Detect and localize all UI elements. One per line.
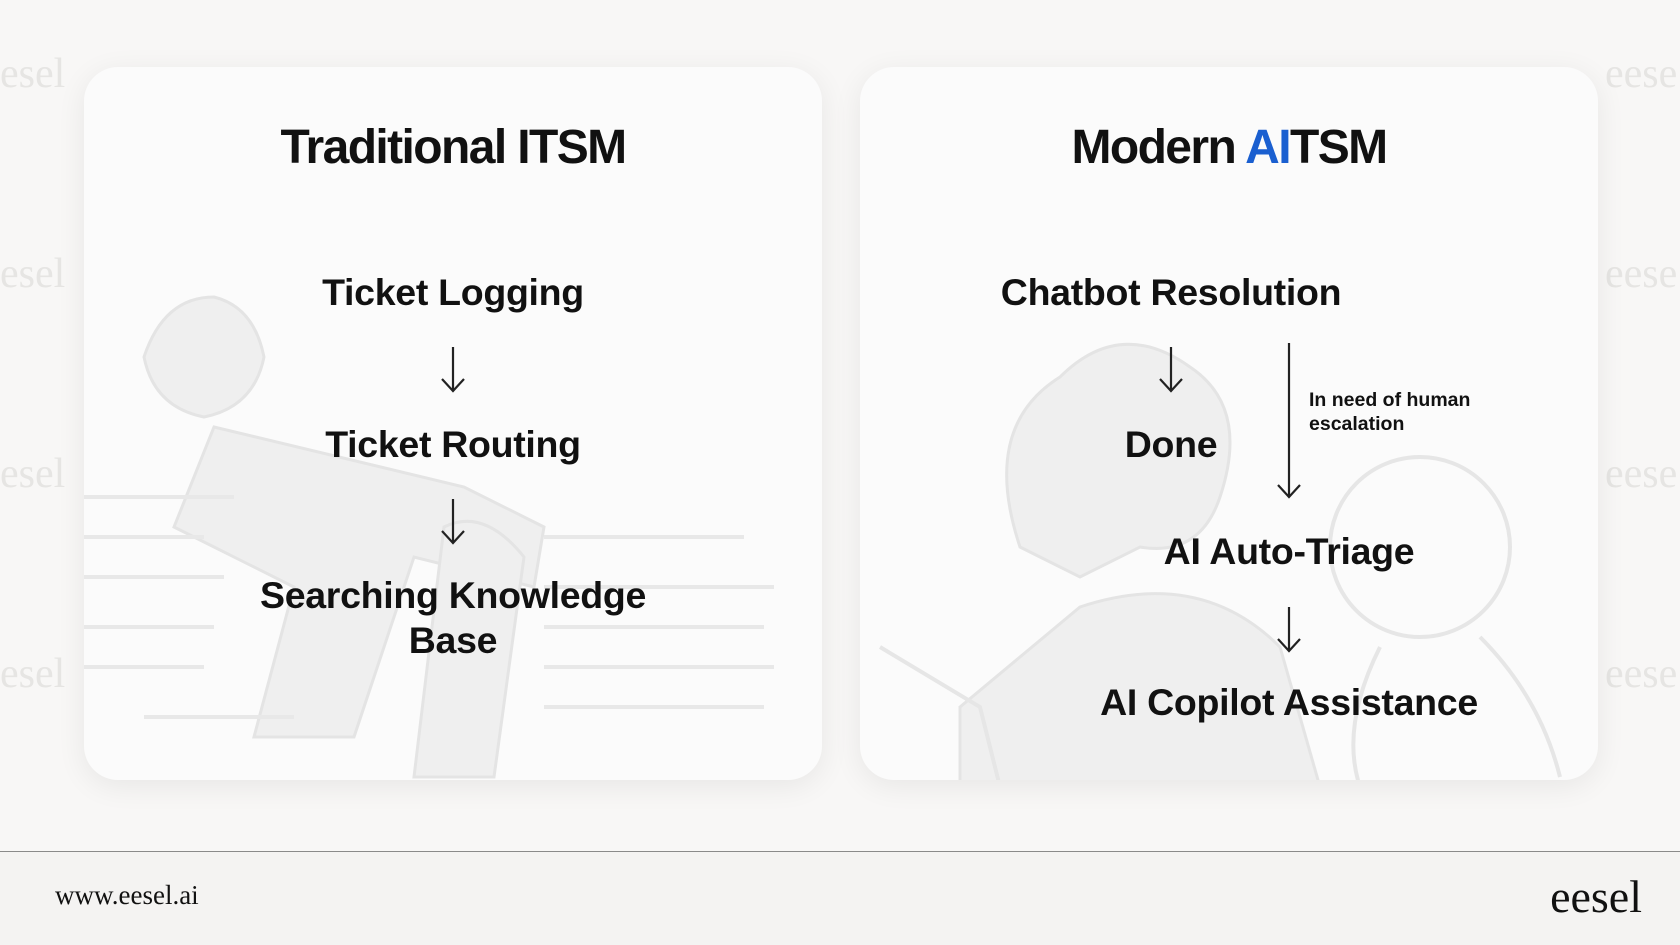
background watermarks: esel	[0, 251, 65, 297]
step: searching knowledge base: Base	[409, 619, 497, 661]
arrow: to done	[1159, 347, 1183, 392]
escalation label: In need of human	[1309, 389, 1470, 411]
step: searching knowledge base	[260, 574, 646, 661]
background watermarks: eese	[1605, 251, 1677, 297]
panel: modern AITSM	[860, 67, 1598, 780]
escalation label	[1309, 389, 1470, 435]
arrow: escalation	[1277, 343, 1301, 498]
step: searching knowledge base: Searching Knowledge	[260, 574, 646, 616]
step: ticket routing: Ticket Routing	[325, 423, 581, 465]
footer logo: eesel	[1550, 871, 1642, 922]
step: ticket logging: Ticket Logging	[322, 271, 584, 313]
arrow	[441, 499, 465, 544]
background watermarks: eese	[1605, 451, 1677, 497]
background watermarks: esel	[0, 451, 65, 497]
escalation label: escalation	[1309, 413, 1404, 435]
background watermarks: esel	[0, 51, 65, 97]
arrow	[1277, 607, 1301, 652]
arrow	[441, 347, 465, 392]
step: done: Done	[1125, 423, 1217, 465]
footer	[0, 851, 1680, 945]
background watermarks: eese	[1605, 51, 1677, 97]
step: AI auto-triage: AI Auto-Triage	[1164, 530, 1414, 572]
step: chatbot resolution: Chatbot Resolution	[1001, 271, 1341, 313]
heading: Traditional ITSM	[280, 121, 626, 174]
step: AI copilot assistance: AI Copilot Assistance	[1100, 681, 1478, 723]
background watermarks: esel	[0, 651, 65, 697]
heading: Modern AITSM	[1071, 121, 1387, 174]
background watermarks: eese	[1605, 651, 1677, 697]
panel: traditional ITSM	[84, 67, 822, 780]
footer url: www.eesel.ai	[55, 880, 199, 910]
